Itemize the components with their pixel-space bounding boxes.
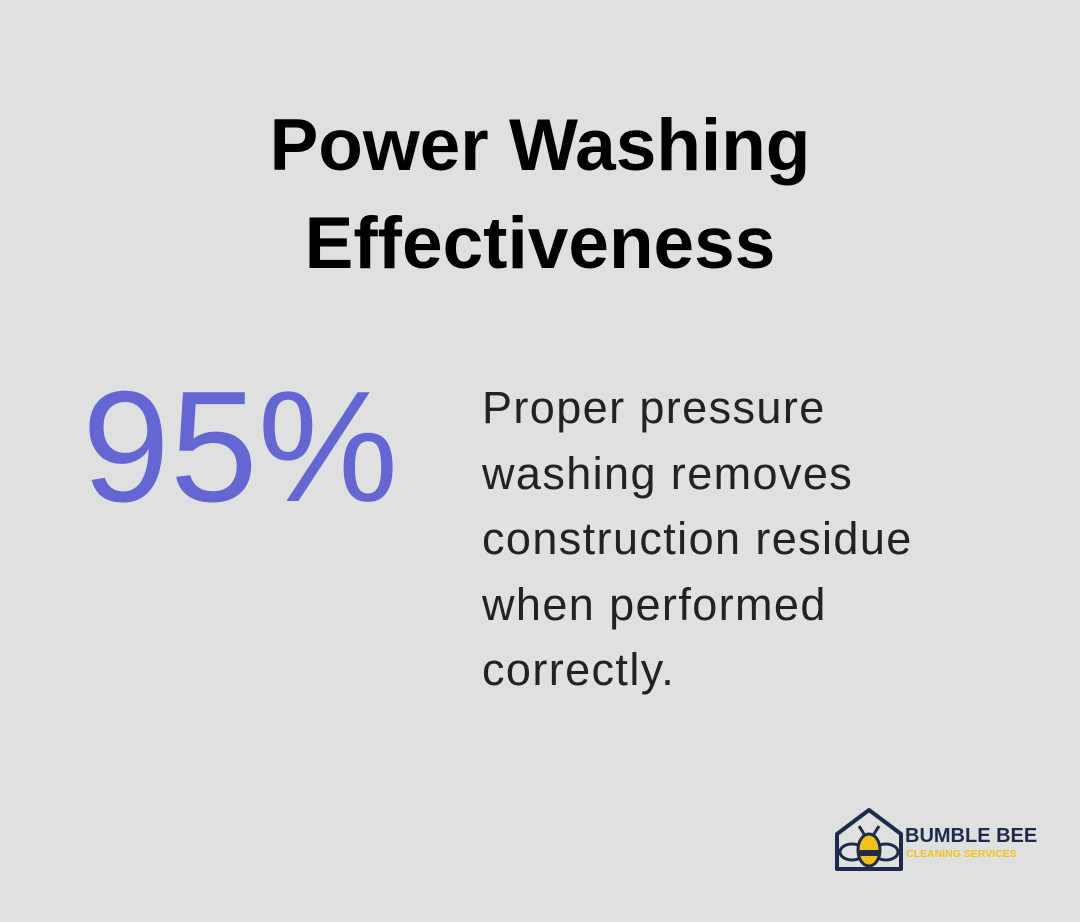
- big number: 95%: [82, 359, 398, 535]
- description: washing removes: [482, 448, 853, 498]
- description: Proper pressure: [482, 382, 826, 433]
- logo: [835, 808, 1037, 871]
- description: when performed: [482, 578, 827, 630]
- logo: CLEANING SERVICES: [906, 848, 1017, 860]
- icon: bee house: [835, 808, 903, 871]
- title: Power Washing: [270, 105, 810, 186]
- description: construction residue: [482, 513, 913, 564]
- description: [482, 382, 913, 695]
- description: correctly.: [482, 644, 675, 695]
- title: [270, 105, 810, 284]
- logo text: BUMBLE BEE: [905, 825, 1037, 847]
- title: Effectiveness: [305, 203, 775, 284]
